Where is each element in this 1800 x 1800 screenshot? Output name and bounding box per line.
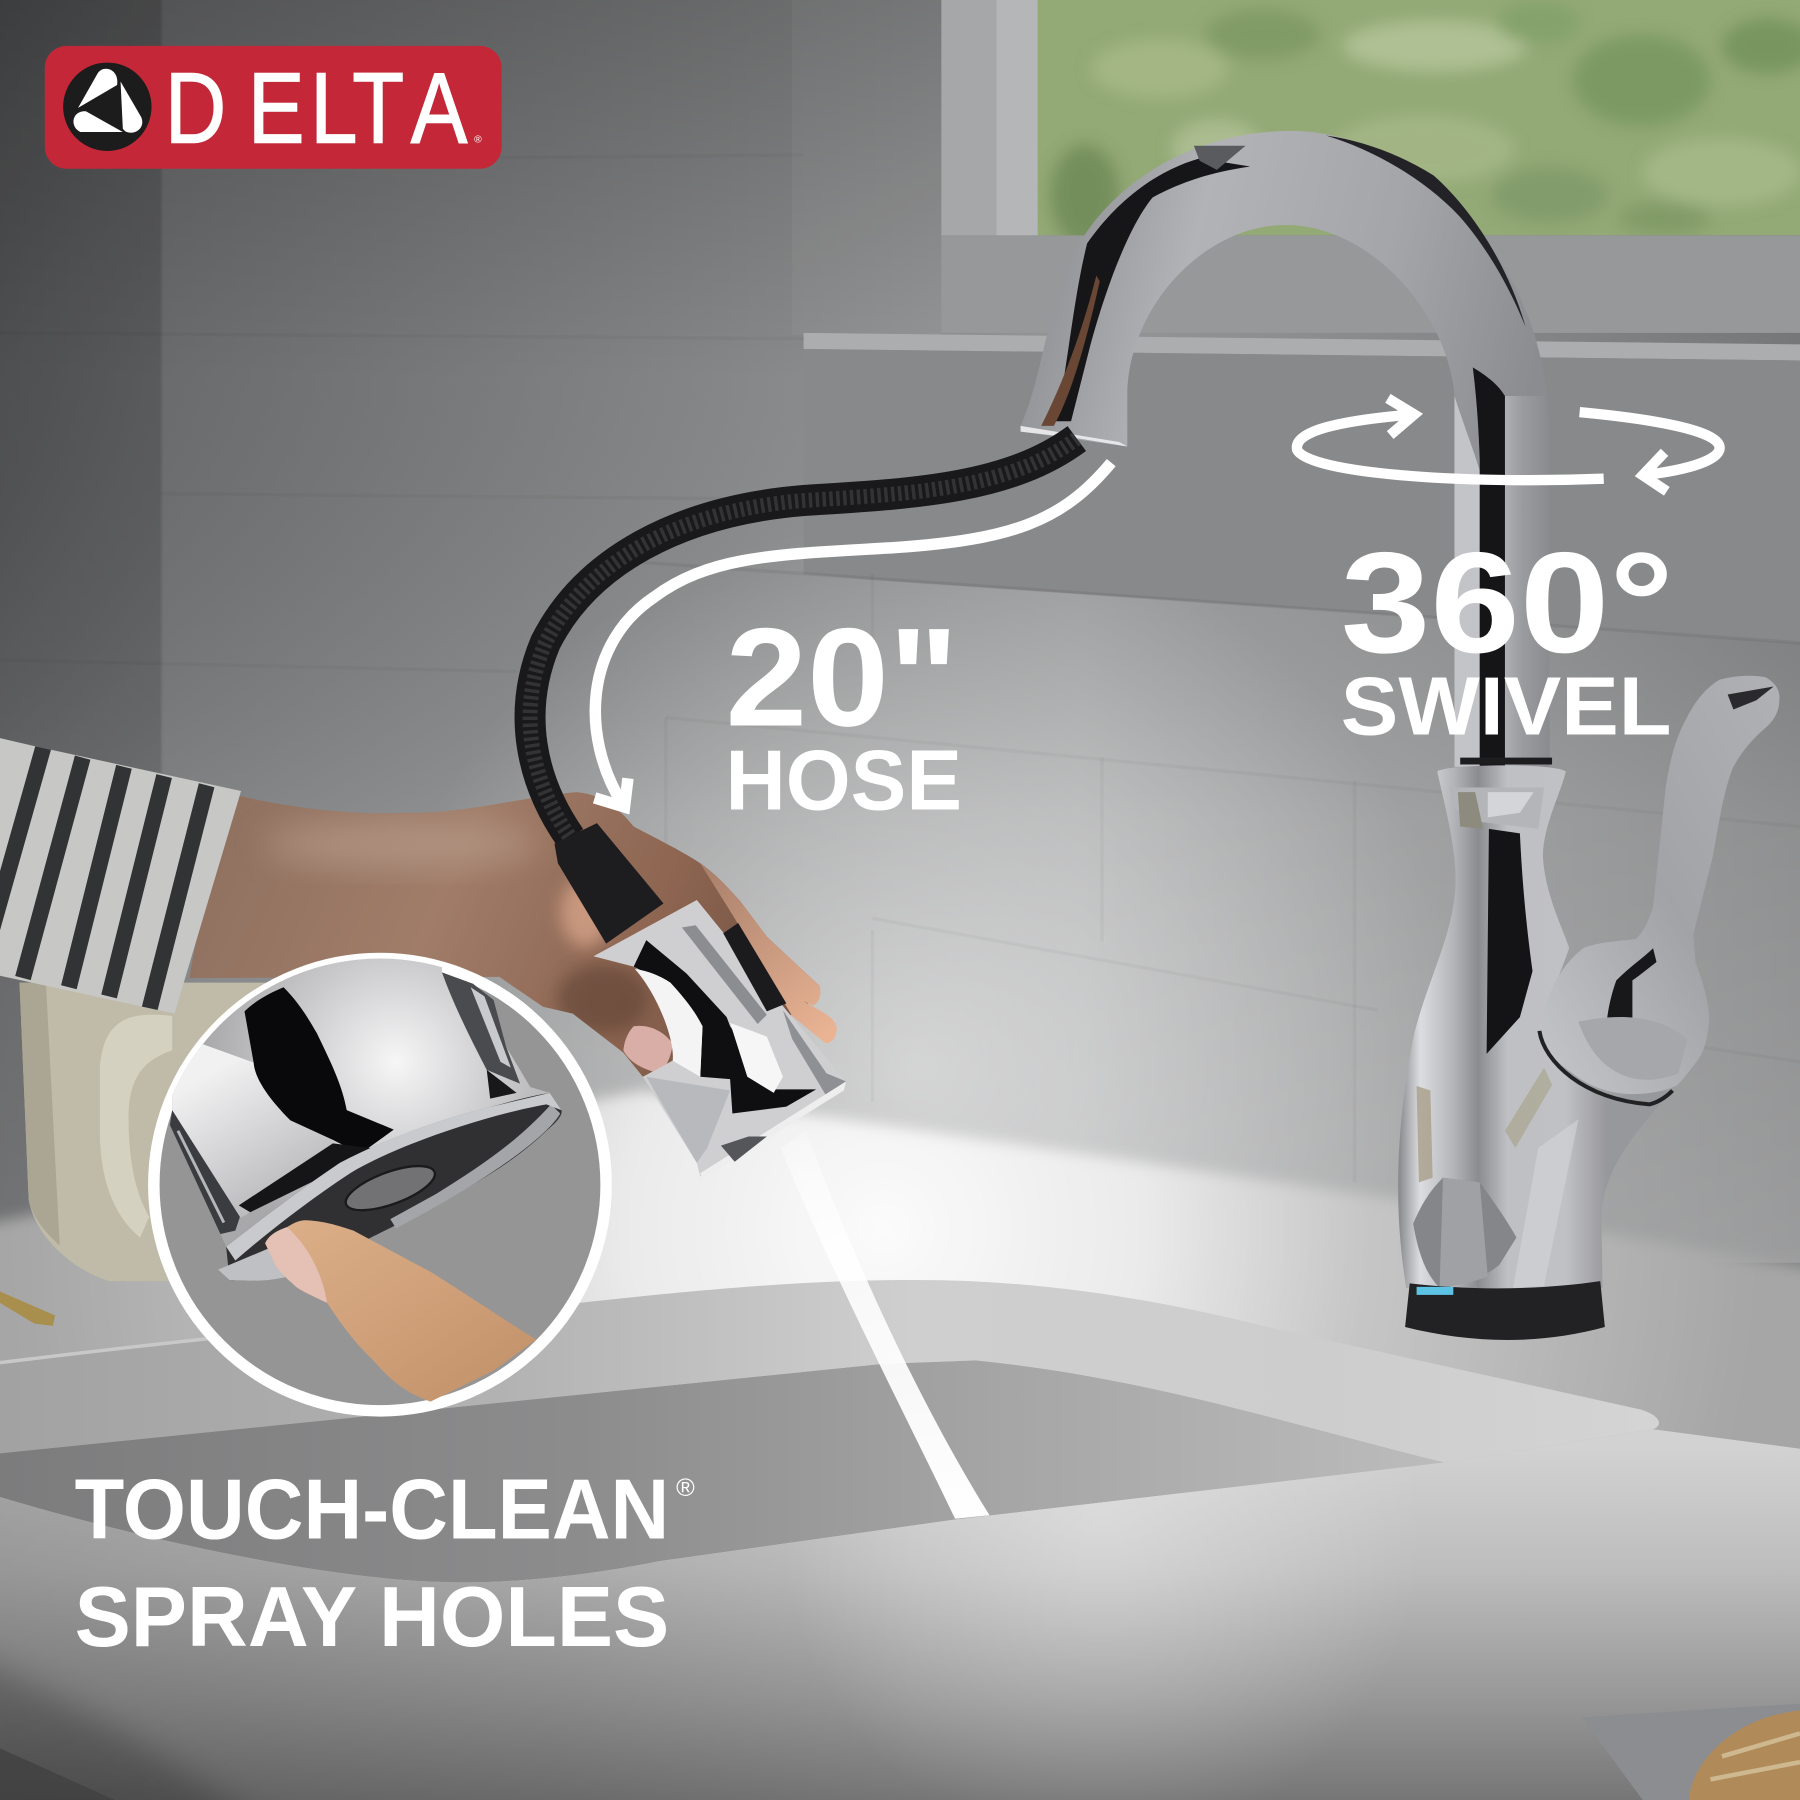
plate and food (1582, 1704, 1800, 1800)
inset circle: touch-clean spray holes close-up (154, 941, 606, 1411)
water stream (781, 1131, 990, 1519)
logo mark (63, 63, 152, 151)
faucet base body (1398, 765, 1673, 1288)
text: hose length: 20" (726, 599, 959, 756)
faucet spout (1021, 131, 1552, 767)
arrow: hose length curve (595, 463, 1111, 807)
thumb nail (623, 1026, 673, 1073)
sink basin (0, 1360, 1444, 1582)
hose connector (554, 823, 664, 944)
front counter (0, 1429, 1800, 1800)
spout tube reflections (1454, 396, 1480, 767)
gold spoon (0, 1291, 55, 1326)
window with foliage (1038, 0, 1800, 246)
text: touch-clean spray holes (75, 1461, 695, 1664)
black base ring with indicator light (1405, 1281, 1605, 1340)
sprayer head (593, 900, 846, 1177)
text: touch-clean spray holes: TOUCH-CLEAN (75, 1461, 669, 1556)
hand (189, 792, 820, 1077)
braided black hose (530, 439, 1077, 838)
faucet (1021, 131, 1780, 1340)
inset finger (265, 1220, 536, 1402)
text: touch-clean spray holes: SPRAY HOLES (75, 1569, 669, 1664)
logo: Delta (45, 46, 502, 169)
text: swivel (1341, 523, 1674, 753)
fingertips (700, 863, 837, 1043)
logo: Delta: DELTA (165, 52, 468, 164)
arrow: swivel rotation (1297, 398, 1720, 491)
text: hose length (726, 599, 962, 827)
logo: Delta: ® (474, 134, 482, 145)
faucet handle lever (1539, 676, 1780, 1104)
sleeve with stripes (0, 738, 241, 1014)
inset nozzle face (226, 1093, 562, 1281)
pull-down sprayer (554, 823, 846, 1179)
text: touch-clean spray holes: ® (676, 1474, 695, 1502)
text: hose length: HOSE (726, 732, 962, 827)
mug (20, 983, 276, 1281)
text: swivel: 360° (1341, 523, 1674, 683)
sprayer button (723, 923, 786, 1011)
counter top surface (0, 1091, 1800, 1800)
text: swivel: SWIVEL (1341, 660, 1671, 753)
hand and sleeve (0, 738, 837, 1077)
inset sprayer body (172, 941, 550, 1247)
sink rim band (0, 1280, 1659, 1462)
